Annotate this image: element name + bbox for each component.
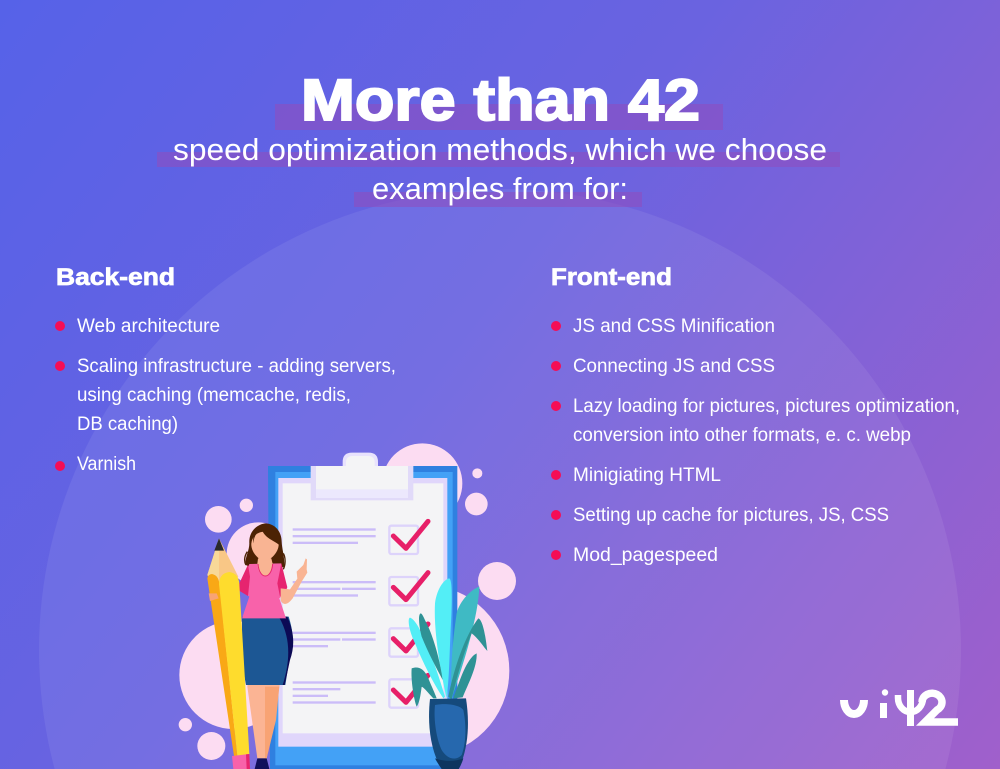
- panel: back-end: [55, 264, 396, 475]
- back-end list: Varnish: [77, 454, 136, 475]
- decorative pink circles: [179, 443, 516, 760]
- front-end list: Minigiating HTML: [573, 465, 721, 486]
- front-end list: Connecting JS and CSS: [573, 356, 775, 377]
- front-end list: Mod_pagespeed: [573, 545, 718, 566]
- back-end heading: Back-end: [56, 264, 175, 291]
- panel: front-end: [551, 264, 960, 566]
- front-end list: [551, 316, 960, 566]
- subtitle line 2: examples from for:: [372, 171, 628, 206]
- plant: [409, 578, 487, 707]
- woman: [239, 523, 307, 769]
- illustration: checklist with woman, pencil and plant: [179, 443, 516, 769]
- back-end list: [55, 316, 396, 475]
- front-end list: Setting up cache for pictures, JS, CSS: [573, 505, 889, 526]
- title heading: More than 42: [301, 68, 700, 133]
- clipboard: [268, 453, 457, 769]
- large background circle: [39, 189, 961, 769]
- back-end list: Web architecture: [77, 316, 220, 337]
- back-end list: Scaling infrastructure - adding servers,: [77, 356, 396, 377]
- logo: [844, 689, 958, 726]
- checklist text lines: [293, 528, 376, 704]
- front-end heading: Front-end: [551, 264, 672, 291]
- vase: [429, 698, 468, 769]
- back-end list: DB caching): [77, 414, 178, 435]
- pencil: [207, 538, 250, 769]
- checkboxes: [389, 526, 418, 708]
- subtitle line 1: speed optimization methods, which we choose: [173, 132, 827, 167]
- front-end list: Lazy loading for pictures, pictures optimization,: [573, 396, 960, 417]
- front-end list: conversion into other formats, e. c. webp: [573, 425, 911, 446]
- title block: [157, 68, 840, 207]
- front-end list: JS and CSS Minification: [573, 316, 775, 337]
- check marks: [393, 521, 428, 702]
- back-end list: using caching (memcache, redis,: [77, 385, 351, 406]
